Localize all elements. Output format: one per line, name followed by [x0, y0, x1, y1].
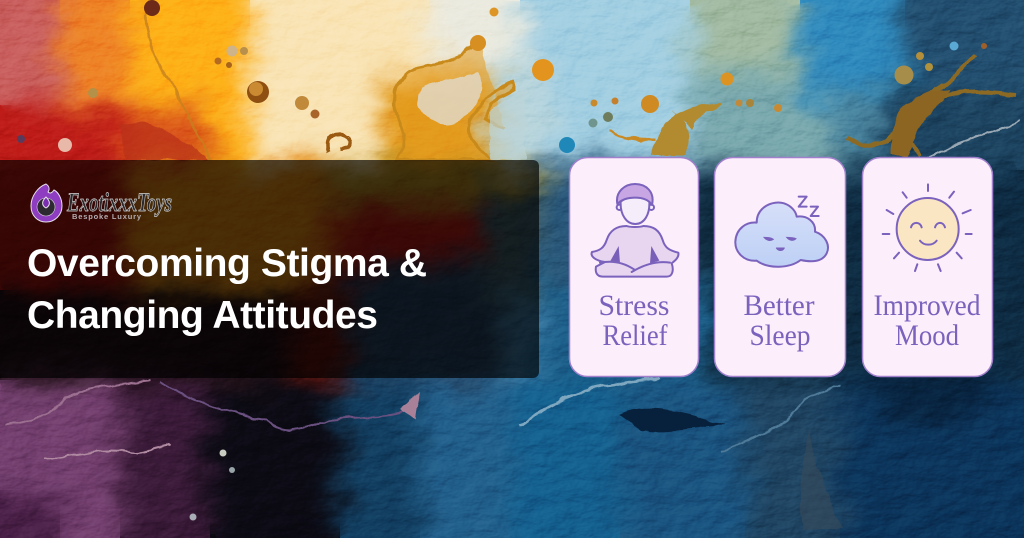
label: improved mood: Mood — [895, 319, 959, 352]
label: stress relief: Stress — [598, 289, 670, 322]
title — [27, 242, 427, 337]
logo wordmark: ExotixxxToys — [66, 188, 172, 217]
logo: ExotixxxToys — [31, 184, 172, 222]
icon: smiling sun — [883, 184, 972, 271]
card: stress relief — [570, 158, 698, 376]
label: stress relief: Relief — [602, 319, 668, 352]
panel: dark title panel — [0, 160, 539, 378]
title: Overcoming Stigma & — [27, 242, 427, 285]
title: Changing Attitudes — [27, 294, 378, 337]
logo tagline: Bespoke Luxury — [72, 212, 142, 221]
label: better sleep: Better — [744, 289, 814, 322]
card: better sleep — [714, 158, 846, 376]
logo icon: purple flame ring — [31, 184, 62, 222]
label: better sleep: Sleep — [750, 319, 810, 352]
icon: sleeping cloud — [735, 197, 828, 267]
label: stress relief — [598, 289, 670, 352]
icon: meditating person — [592, 184, 678, 277]
label: improved mood: Improved — [874, 289, 980, 322]
label: improved mood — [874, 289, 980, 352]
label: better sleep — [744, 289, 814, 352]
card: improved mood — [862, 158, 992, 376]
